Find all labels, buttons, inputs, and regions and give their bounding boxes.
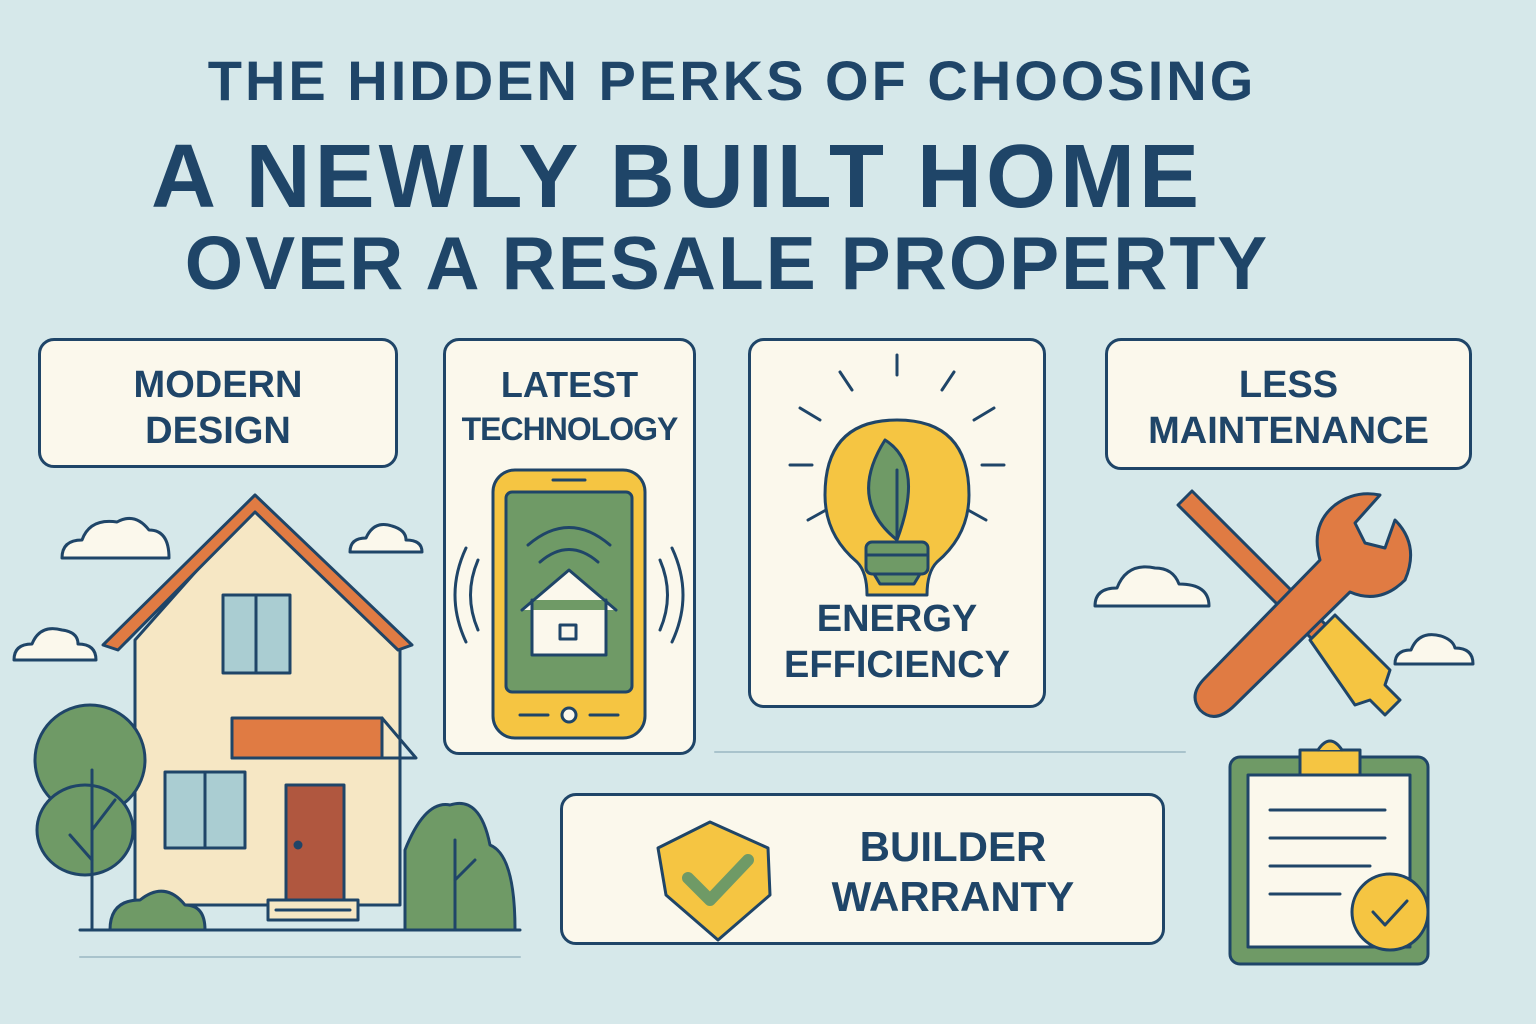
illustration: house [35,495,520,930]
icon: clipboard [1230,741,1428,964]
panel: energy efficiency [748,338,1046,708]
panel: builder warranty: BUILDER [860,823,1046,870]
panel: builder warranty [560,793,1165,945]
icon: wrench and screwdriver [1178,491,1411,716]
panel: energy efficiency: ENERGY [817,598,977,640]
title [151,49,1269,305]
icon: smartphone [455,470,683,738]
title line 1: THE HIDDEN PERKS OF CHOOSING [208,49,1256,112]
divider [715,751,1185,753]
panel: modern design: MODERN [134,364,302,406]
title line 2: A NEWLY BUILT HOME [151,127,1203,227]
clouds [14,518,1473,664]
panel: less maintenance: LESS [1239,364,1338,406]
panel: builder warranty: WARRANTY [832,873,1074,920]
panel: energy efficiency: EFFICIENCY [784,644,1010,686]
title line 3: OVER A RESALE PROPERTY [185,221,1269,305]
icon: shield check [658,822,770,940]
icon: light bulb [790,355,1004,595]
panel: modern design: DESIGN [145,410,291,452]
panel: less maintenance: MAINTENANCE [1148,410,1429,452]
panel: less maintenance [1105,338,1472,470]
panel: latest technology [443,338,696,755]
panel: modern design [38,338,398,468]
panel: latest technology: LATEST [501,364,638,405]
panel: latest technology: TECHNOLOGY [462,411,677,447]
